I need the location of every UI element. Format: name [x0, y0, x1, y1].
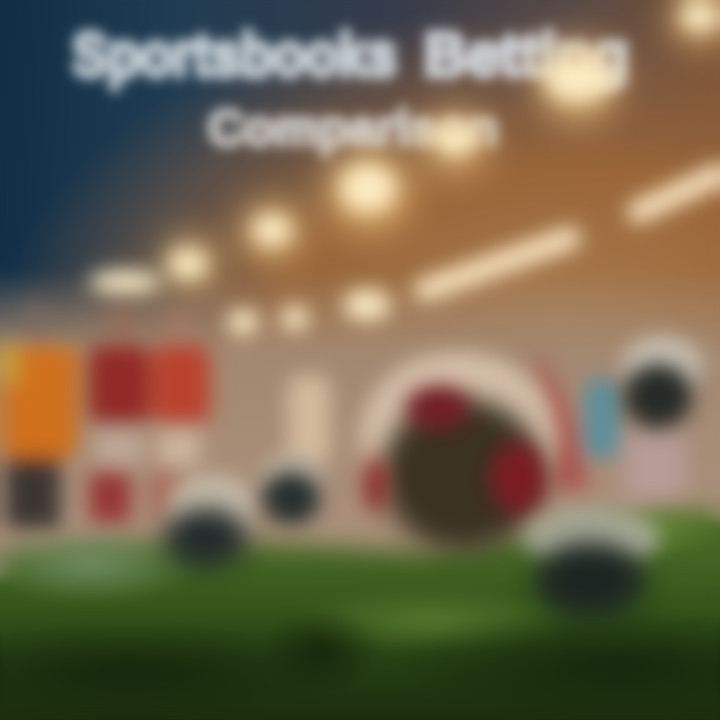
soccer ball: large foreground: [360, 352, 556, 550]
player: right side teal: [535, 345, 685, 500]
grass: [0, 502, 720, 720]
soccer ball: small centre: [262, 454, 322, 524]
player: red kit left: [88, 309, 150, 522]
title: Sportsbooks: [72, 21, 397, 90]
title: [72, 21, 629, 156]
title: Comparison: [208, 100, 498, 156]
stadium backdrop: [0, 270, 720, 600]
title: Betting: [424, 21, 629, 90]
stadium lights: [89, 0, 720, 335]
player: red kit right: [150, 313, 210, 515]
player: distant centre: [288, 375, 330, 465]
soccer ball: lower right: [524, 508, 660, 618]
player: orange kit: [0, 304, 78, 528]
soccer ball: upper right: [622, 336, 702, 428]
soccer ball: small left: [164, 476, 256, 568]
players: [0, 304, 685, 528]
